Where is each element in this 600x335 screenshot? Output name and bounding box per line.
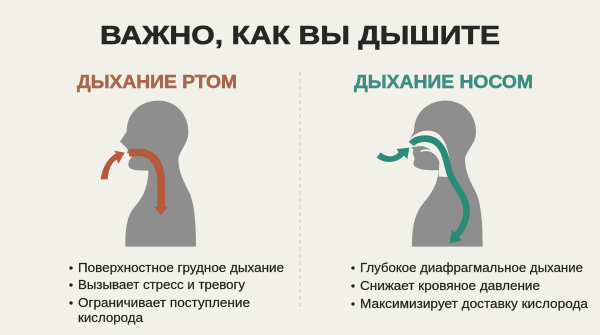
list: mouth breathing effects: Поверхностное грудное дыхание: [78, 261, 284, 275]
arrow: air entering the mouth: [101, 151, 125, 179]
body silhouette: [407, 101, 483, 247]
panel: mouth breathing: [69, 72, 284, 325]
list: mouth breathing effects: кислорода: [78, 311, 143, 325]
list: nose breathing effects: [351, 261, 588, 311]
list: nose breathing effects: Глубокое диафрагмальное дыхание: [360, 261, 583, 275]
palate gap: [421, 150, 440, 161]
icon: head silhouette with nasal airflow: [377, 101, 483, 247]
body silhouette: [120, 101, 196, 247]
heading: mouth breathing: ДЫХАНИЕ РТОМ: [77, 72, 237, 92]
list: nose breathing effects: Максимизирует доставку кислорода: [360, 297, 588, 311]
list: mouth breathing effects: Ограничивает поступление: [78, 296, 250, 310]
list: mouth breathing effects: [69, 261, 284, 325]
nasal airway gap: [407, 131, 450, 177]
arrow: air going down the throat: [128, 149, 168, 216]
arrow: air going down to the lungs: [411, 139, 467, 237]
arrowhead: [449, 230, 462, 243]
list: mouth breathing effects: Вызывает стресс и тревогу: [78, 278, 246, 292]
arrow: air entering the nose: [377, 148, 409, 162]
mouth gap: [124, 153, 134, 161]
icon: head silhouette with mouth airflow: [101, 101, 196, 247]
panel: nose breathing: [351, 72, 588, 311]
heading: nose breathing: ДЫХАНИЕ НОСОМ: [354, 72, 533, 92]
title: ВАЖНО, КАК ВЫ ДЫШИТЕ: [100, 20, 500, 50]
list: nose breathing effects: Снижает кровяное давление: [360, 279, 540, 293]
